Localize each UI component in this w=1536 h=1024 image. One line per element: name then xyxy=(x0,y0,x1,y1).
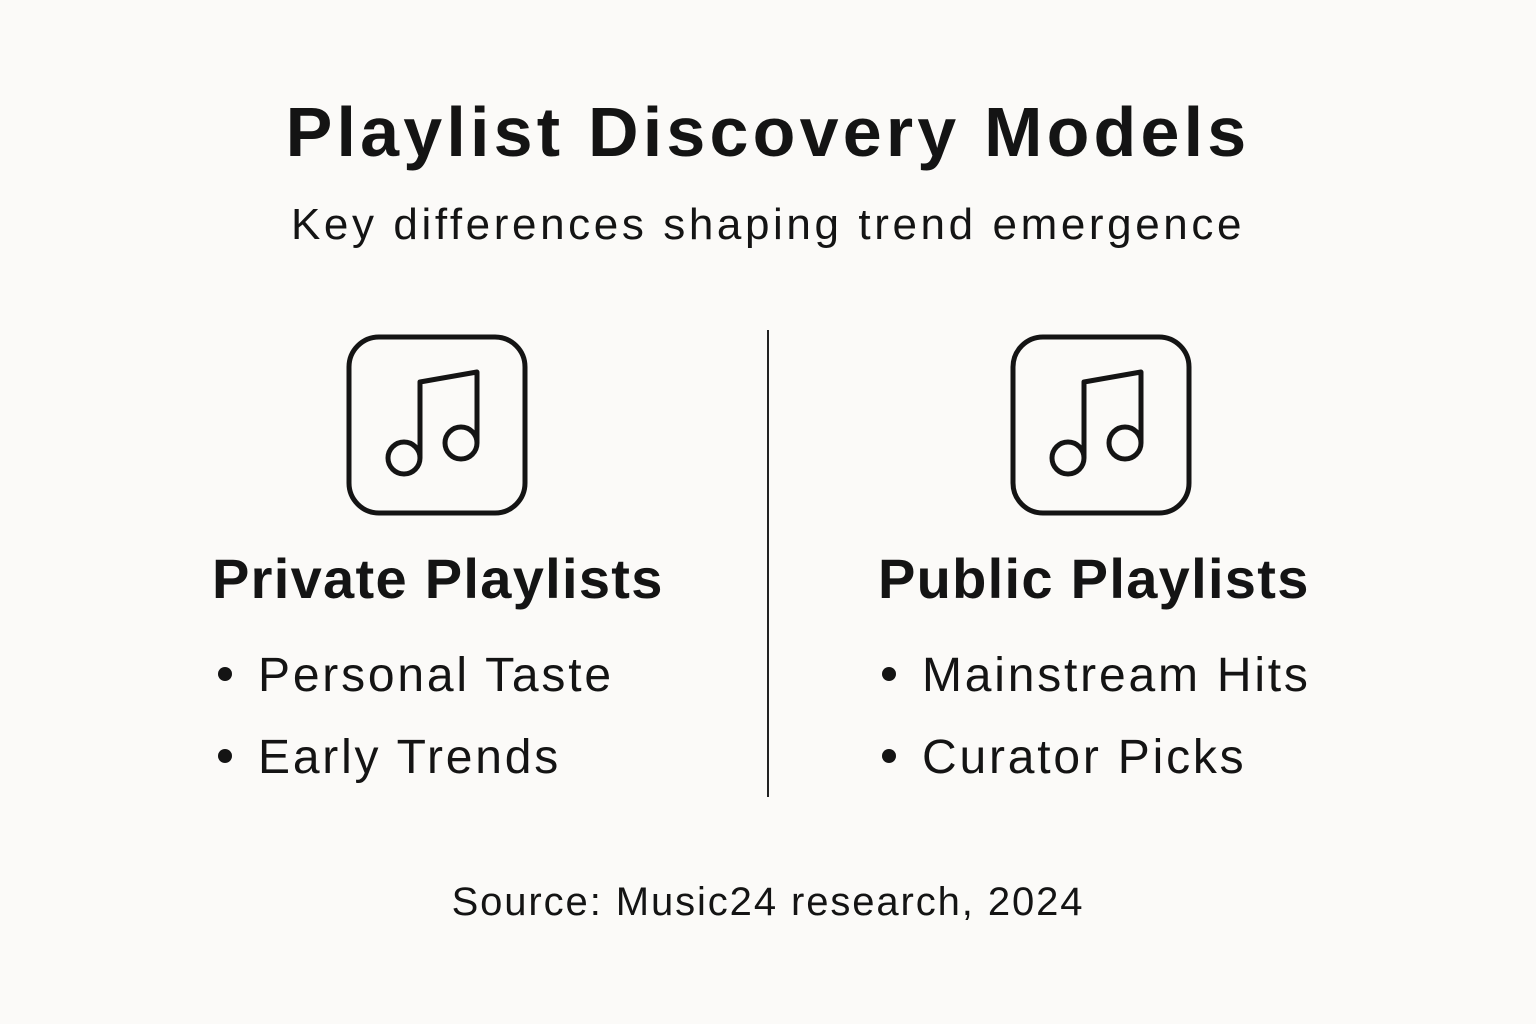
source note: Source: Music24 research, 2024 xyxy=(452,880,1084,924)
panel: public playlists xyxy=(878,334,1311,784)
icon: music note public xyxy=(1010,334,1192,516)
divider xyxy=(767,330,769,797)
heading: private playlists: Private Playlists xyxy=(212,547,664,610)
title: Playlist Discovery Models xyxy=(286,93,1250,171)
heading: public playlists: Public Playlists xyxy=(878,547,1310,610)
panel: private playlists xyxy=(212,334,664,784)
icon: music note private xyxy=(346,334,528,516)
bullet: personal taste: Personal Taste xyxy=(258,649,614,702)
bullet: early trends: Early Trends xyxy=(258,731,561,784)
subtitle: Key differences shaping trend emergence xyxy=(291,200,1245,249)
bullet: mainstream hits: Mainstream Hits xyxy=(922,649,1311,702)
bullet: curator picks: Curator Picks xyxy=(922,731,1246,784)
